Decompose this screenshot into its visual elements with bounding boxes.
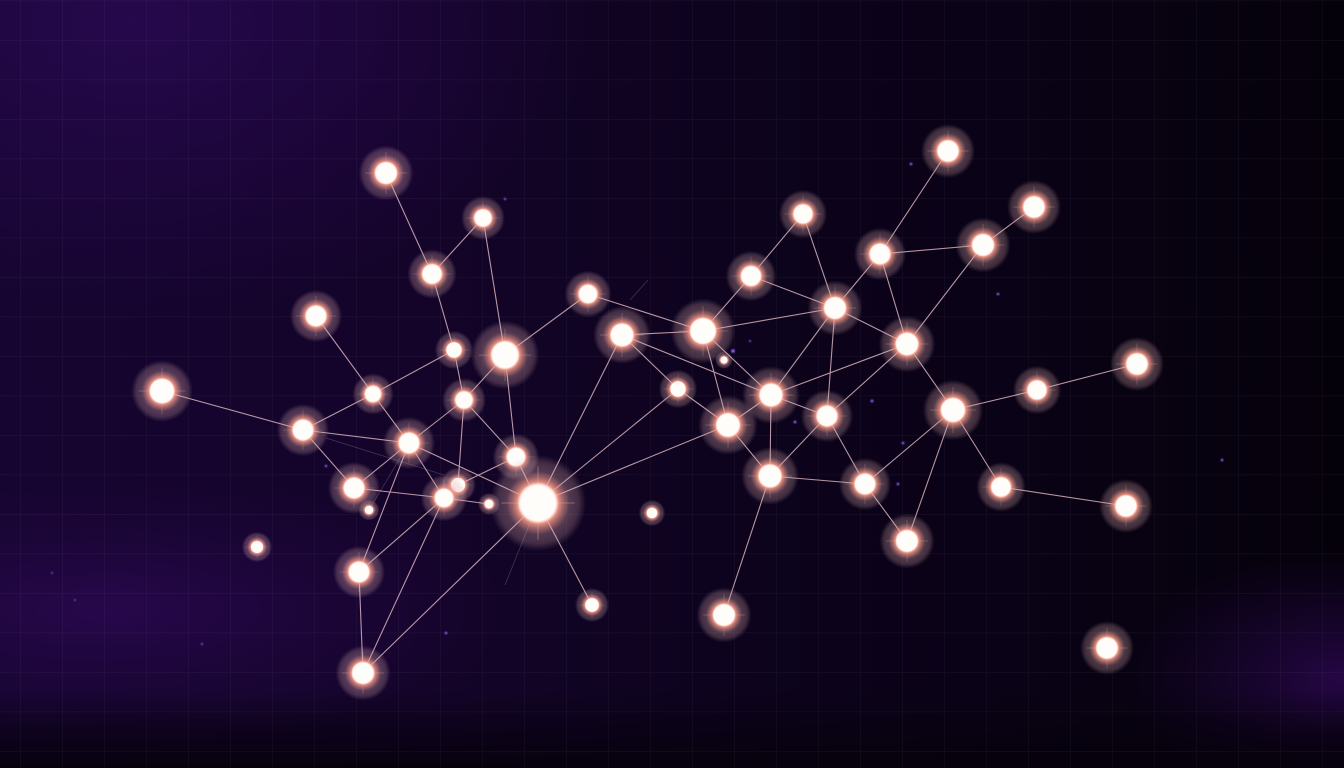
node: central hub — [490, 455, 586, 551]
nodes: centre cluster — [565, 190, 862, 643]
faint secondary links — [326, 280, 648, 585]
nodes: right branch — [839, 124, 1164, 675]
nodes: lower left cluster — [242, 404, 665, 700]
nodes: upper left branch — [131, 146, 539, 422]
network links — [162, 151, 1137, 673]
background particles — [51, 163, 1223, 645]
